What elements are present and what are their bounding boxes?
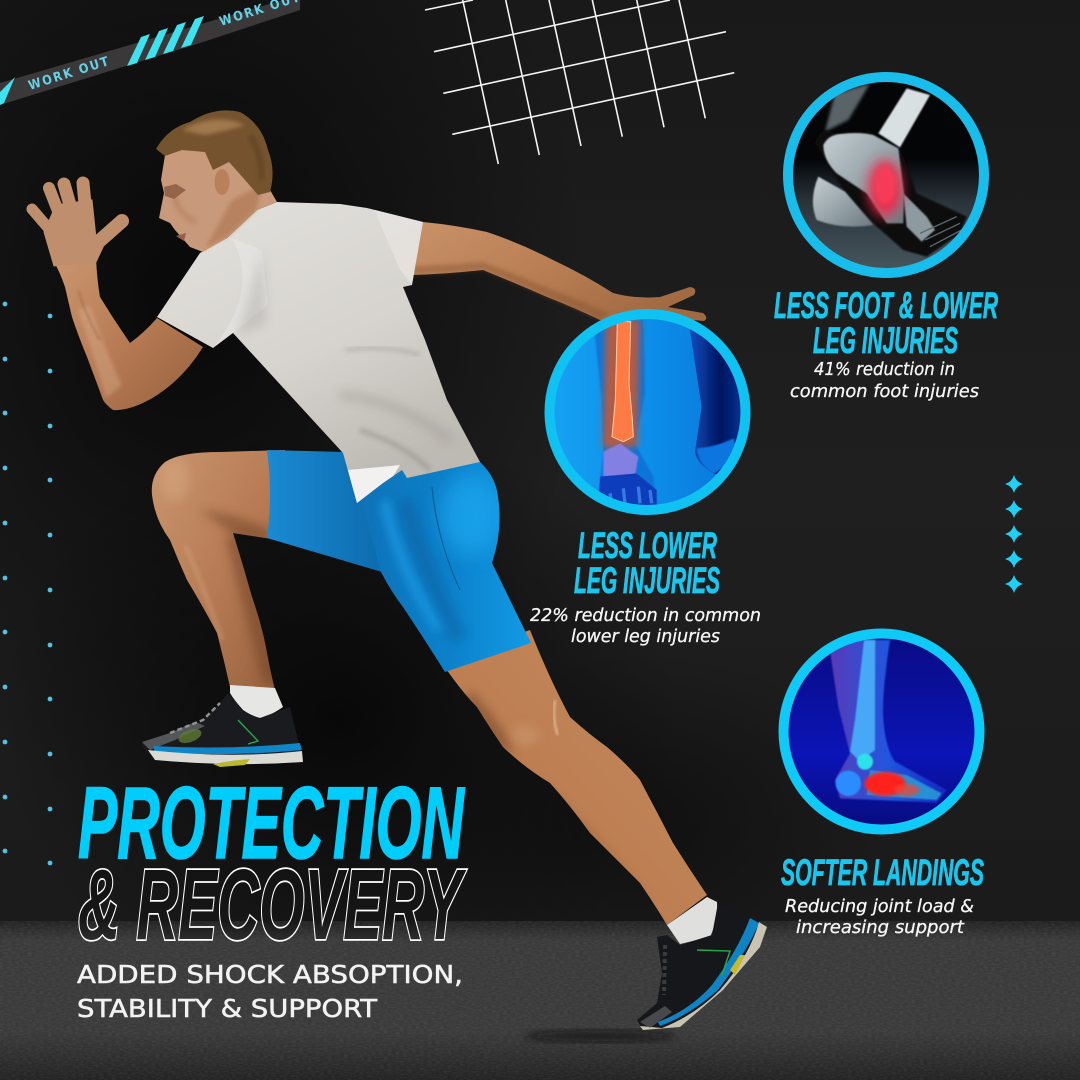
subtitle bbox=[77, 960, 463, 1023]
landing shoe bbox=[637, 903, 767, 1030]
label: softer landings: Reducing joint load & bbox=[785, 897, 974, 917]
circle: foot x-ray bbox=[780, 70, 993, 280]
hair bbox=[156, 110, 273, 195]
label: less foot and lower leg injuries: LEG INJURIES bbox=[813, 319, 958, 361]
label: softer landings: increasing support bbox=[796, 918, 965, 938]
lunging leg sock bbox=[667, 897, 717, 944]
lunging leg bbox=[440, 630, 707, 925]
ear bbox=[214, 169, 230, 195]
label: softer landings bbox=[781, 851, 984, 938]
shirt bbox=[157, 200, 480, 510]
raised leg bbox=[152, 450, 285, 690]
back arm bbox=[412, 222, 706, 326]
title bbox=[78, 766, 467, 961]
title: PROTECTION bbox=[78, 766, 465, 880]
label: less foot and lower leg injuries bbox=[774, 284, 998, 402]
hand bbox=[32, 183, 122, 266]
label: less lower leg injuries: LEG INJURIES bbox=[574, 559, 720, 601]
label: less lower leg injuries: lower leg injuries bbox=[571, 627, 720, 647]
front arm bbox=[52, 258, 203, 410]
subtitle: STABILITY & SUPPORT bbox=[77, 994, 378, 1023]
circle: soft landing x-ray bbox=[775, 625, 990, 840]
raised leg sock bbox=[230, 685, 283, 718]
shorts right thigh bbox=[362, 461, 531, 672]
raised shoe bbox=[142, 693, 303, 767]
eye and brow bbox=[164, 184, 186, 199]
subtitle: ADDED SHOCK ABSOPTION, bbox=[77, 960, 463, 989]
label: less lower leg injuries bbox=[530, 524, 761, 647]
title: & RECOVERY bbox=[78, 849, 467, 961]
head and neck bbox=[159, 140, 277, 252]
work out banner bbox=[0, 0, 303, 105]
sparkle stars bbox=[1005, 475, 1023, 593]
label: less lower leg injuries: 22% reduction in common bbox=[530, 606, 761, 626]
runner bbox=[32, 110, 767, 1030]
decorative grid bbox=[425, 0, 734, 164]
circle: lower leg x-ray bbox=[544, 309, 750, 515]
label: less foot and lower leg injuries: common foot injuries bbox=[790, 382, 979, 402]
gym floor bbox=[0, 921, 1080, 1080]
shorts left thigh bbox=[267, 450, 382, 572]
label: less lower leg injuries: LESS LOWER bbox=[578, 524, 717, 566]
label: less foot and lower leg injuries: 41% reduction in bbox=[814, 360, 955, 380]
dotted columns bbox=[3, 302, 52, 865]
work out banner: WORK OUT bbox=[27, 54, 112, 94]
